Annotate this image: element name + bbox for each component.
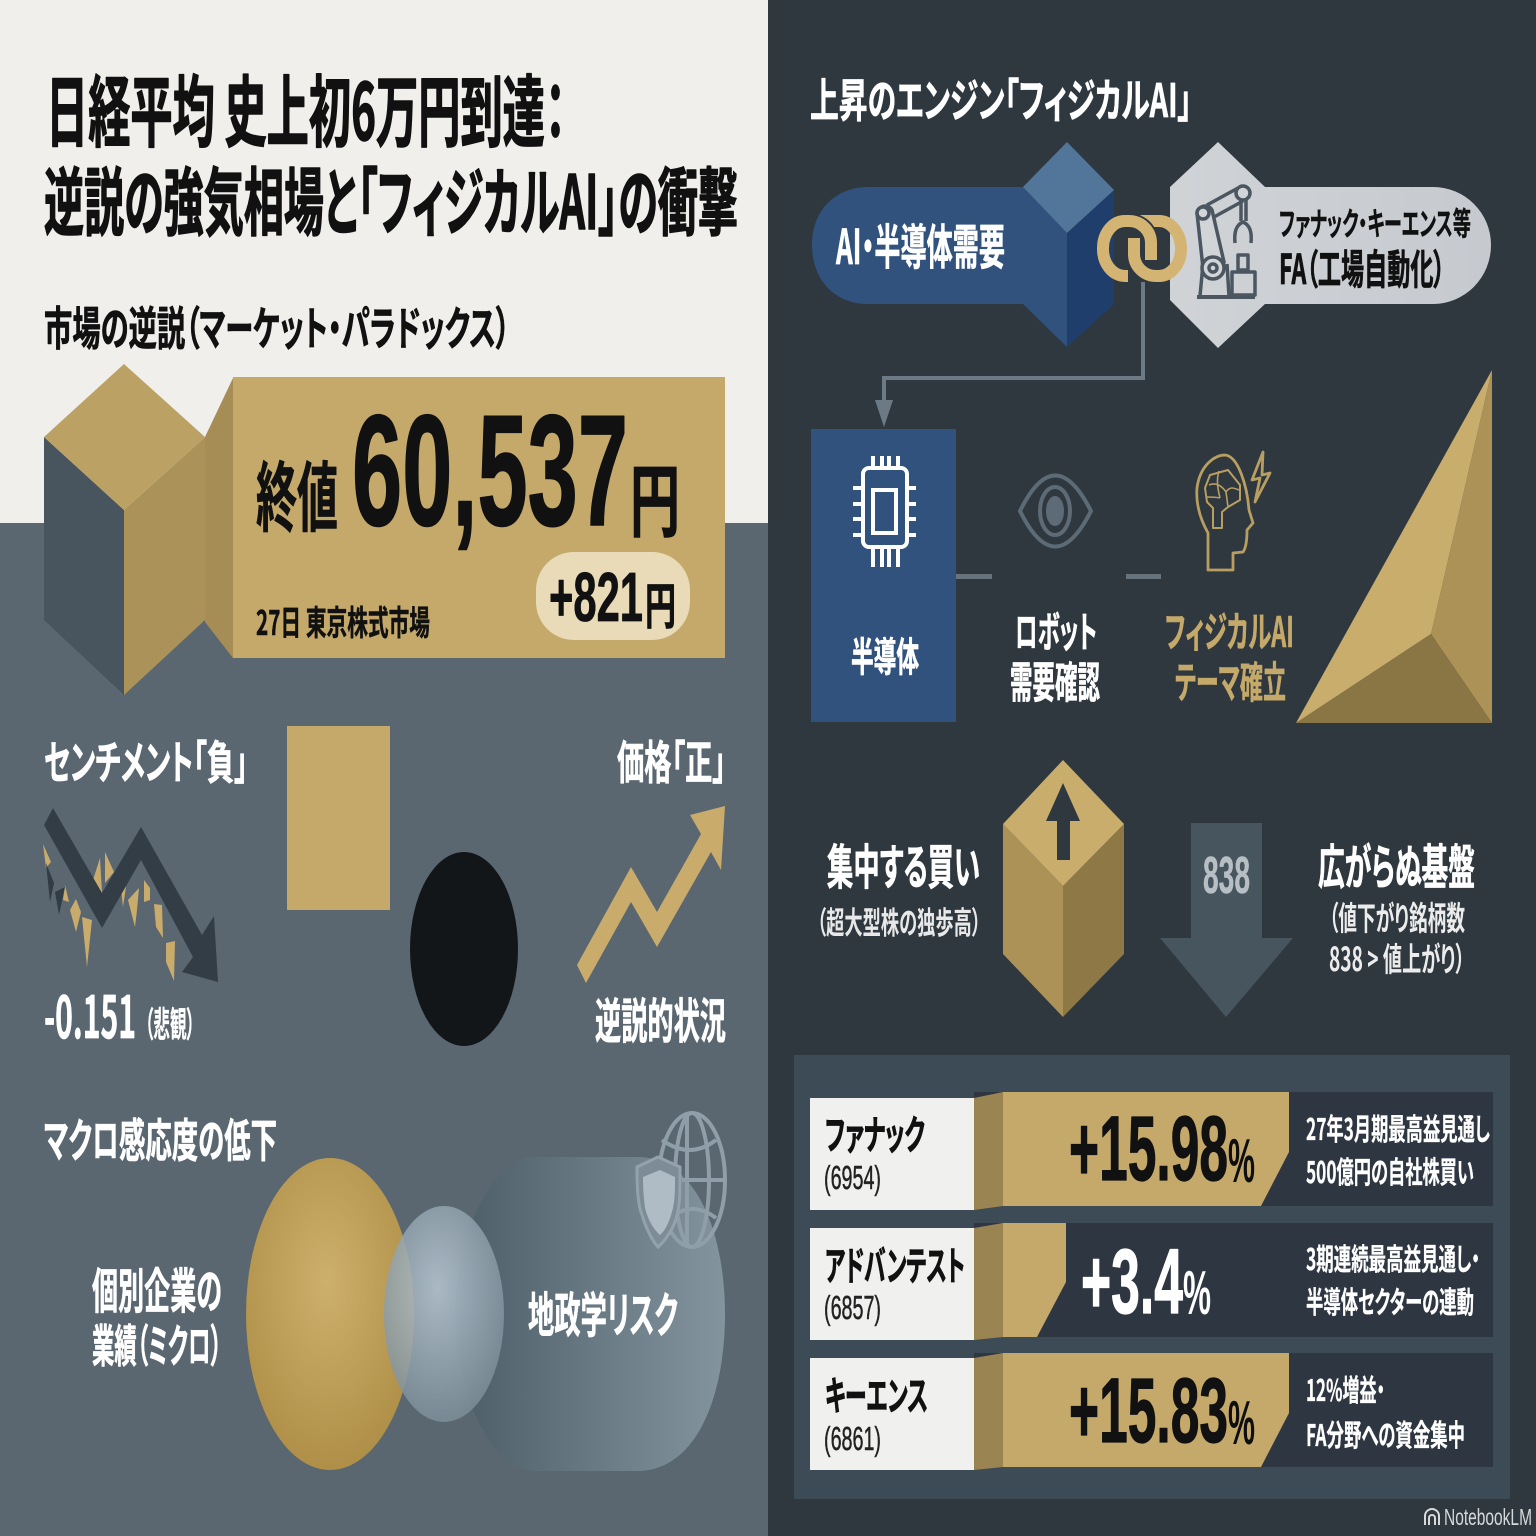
icon: chip	[853, 456, 916, 567]
row: Fanuc: +15.98	[1069, 1098, 1228, 1200]
row: Keyence: +15.83	[1069, 1360, 1228, 1462]
narrow breadth label	[1318, 828, 1475, 981]
row: Keyence: キーエンス	[825, 1364, 928, 1422]
panel: left market paradox: （悲観）	[145, 997, 195, 1048]
step: robot demand: 需要確認	[1010, 649, 1100, 711]
row: Advantest: (6857)	[824, 1289, 881, 1326]
row: Keyence: 12%増益・	[1306, 1366, 1385, 1410]
row: Advantest	[810, 1223, 1493, 1340]
row: Fanuc: (6954)	[824, 1159, 881, 1196]
step: robot demand: ロボット	[1015, 599, 1097, 660]
icon: down arrow 838: 838	[1203, 847, 1250, 905]
micro label: 個別企業の	[92, 1252, 222, 1322]
icon: rising gold pyramid	[1296, 370, 1492, 723]
row: Advantest: +3.4	[1081, 1231, 1183, 1333]
chart: rising arrow	[577, 806, 725, 983]
geopolitics label: 地政学リスク	[528, 1276, 678, 1346]
paradox label: 逆説的状況	[595, 982, 726, 1052]
title: 逆説の強気相場と「フィジカルAI」の衝撃	[44, 144, 738, 251]
sentiment value: -0.151	[44, 971, 136, 1055]
icon: down arrow 838	[1160, 823, 1293, 1017]
closing price banner	[233, 377, 725, 658]
concentrated buying label	[817, 828, 981, 943]
row: Fanuc: ファナック	[825, 1103, 925, 1161]
step: physical AI theme	[1165, 452, 1294, 711]
icon: chain link	[1103, 221, 1181, 276]
title: 日経平均 史上初6万円到達：	[46, 51, 566, 163]
connector arrow to semiconductor	[875, 282, 1143, 427]
AI semiconductor demand block: AI・半導体需要	[835, 208, 1005, 278]
black ellipse	[410, 852, 518, 1046]
change pill: 円	[645, 567, 676, 639]
concentrated buying label: 集中する買い	[827, 828, 980, 898]
change pill: +821	[549, 558, 643, 636]
micro label	[92, 1252, 222, 1375]
row: Fanuc	[810, 1092, 1493, 1210]
chart: falling arrow with shards	[43, 808, 218, 982]
diagram: overlapping micro and geopolitics: 業績（ミクロ）	[92, 1310, 222, 1375]
row: Advantest: アドバンテスト	[825, 1234, 965, 1292]
factory automation block	[1170, 142, 1491, 348]
panel: right physical AI engine	[768, 0, 1536, 1536]
section heading: physical AI: 上昇のエンジン「フィジカルAI」	[810, 65, 1192, 131]
step: physical AI theme: フィジカルAI	[1165, 599, 1294, 660]
row: Keyence: (6861)	[824, 1420, 881, 1457]
row: Fanuc: %	[1228, 1127, 1255, 1196]
row: Keyence	[810, 1353, 1493, 1470]
icon: robot arm	[1197, 186, 1255, 297]
concentrated buying label: （超大型株の独歩高）	[817, 898, 981, 943]
gold rectangle	[287, 726, 390, 910]
stock table panel	[794, 1055, 1510, 1499]
overlap lens	[384, 1206, 504, 1422]
closing price banner: 終値	[256, 437, 338, 547]
price heading: 価格「正」	[617, 727, 726, 793]
icon: gold block with up arrow	[1003, 760, 1124, 1017]
icon: globe and shield	[637, 1113, 725, 1247]
icon: eye	[1020, 476, 1091, 546]
sentiment heading: センチメント「負」	[44, 727, 248, 793]
step: robot demand	[1010, 476, 1100, 711]
AI semiconductor demand block	[812, 142, 1114, 347]
semiconductor box	[811, 429, 956, 722]
panel: left market paradox	[0, 0, 768, 1536]
icon: gold cube	[44, 364, 233, 695]
macro heading: マクロ感応度の低下	[44, 1105, 277, 1171]
diagram: overlapping micro and geopolitics	[92, 1113, 725, 1471]
closing price banner: 27日 東京株式市場	[256, 596, 430, 645]
row: Keyence: %	[1228, 1389, 1255, 1458]
closing price banner: 60,537	[352, 383, 628, 559]
circle: micro earnings	[246, 1158, 414, 1470]
semiconductor box: 半導体	[851, 625, 919, 683]
step: physical AI theme: テーマ確立	[1175, 649, 1286, 711]
closing price banner: 円	[630, 438, 680, 554]
shape: geopolitical risk	[455, 1157, 725, 1471]
row: Advantest: %	[1183, 1259, 1211, 1328]
section heading: market paradox: 市場の逆説（マーケット・パラドックス）	[44, 293, 510, 359]
icon: head with brain	[1197, 452, 1270, 570]
title	[44, 51, 738, 251]
